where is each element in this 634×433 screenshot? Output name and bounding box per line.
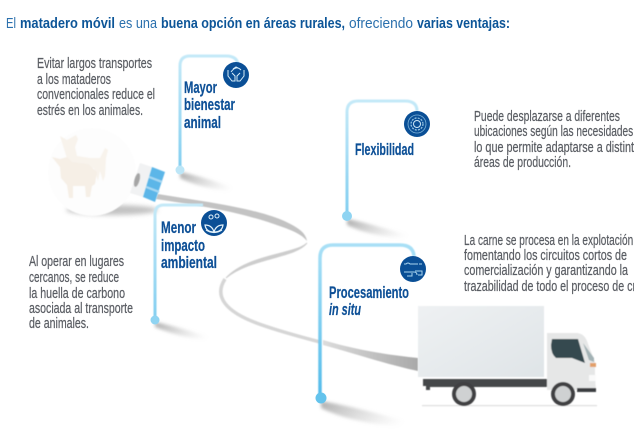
heading: ambiental <box>161 254 217 272</box>
icon: hands with animal <box>223 62 249 88</box>
text: stress: convencionales reduce el <box>37 86 155 103</box>
icon: rotating gear <box>404 111 430 137</box>
heading: Menor <box>161 219 196 237</box>
title: El <box>6 16 16 32</box>
cargo box <box>418 306 544 377</box>
heading <box>329 284 409 319</box>
icon: process flow <box>400 256 426 282</box>
panel: procesamiento in situ <box>316 245 426 404</box>
heading: in situ <box>329 301 361 319</box>
headlight and bumper <box>589 375 596 381</box>
text: flexibility <box>474 108 634 171</box>
connector 2 <box>347 101 417 215</box>
rear wheel <box>452 382 476 406</box>
heading <box>184 79 235 132</box>
text: stress <box>37 55 155 119</box>
illustration: sheep in glass vial <box>48 128 165 216</box>
illustration: truck <box>418 306 597 406</box>
panel: flexibilidad <box>342 101 430 221</box>
text: processing <box>464 232 634 295</box>
text: stress: Evitar largos transportes <box>37 55 152 72</box>
vial shadow <box>66 205 158 215</box>
rear sheep <box>60 135 108 181</box>
text: stress: estrés en los animales. <box>37 102 143 119</box>
title: matadero móvil <box>20 16 115 32</box>
chassis <box>423 379 550 390</box>
text: flexibility: áreas de producción. <box>474 154 571 171</box>
heading: impacto <box>161 237 205 255</box>
heading: Procesamiento <box>329 284 409 302</box>
text: carbon: cercanos, se reduce <box>29 269 119 286</box>
title: es una <box>119 16 158 32</box>
text: carbon <box>29 253 133 332</box>
text: carbon: de animales. <box>29 315 89 332</box>
panel: mayor bienestar animal <box>176 56 249 174</box>
text: carbon: la huella de carbono <box>29 285 125 302</box>
title <box>6 16 510 32</box>
heading: bienestar <box>184 96 235 114</box>
text: stress: a los mataderos <box>37 71 111 88</box>
title: ofreciendo <box>349 16 413 32</box>
title: varias ventajas: <box>417 16 510 32</box>
blue cap <box>143 167 165 202</box>
cab window <box>551 339 585 363</box>
connector 3 <box>155 205 203 320</box>
text: carbon: Al operar en lugares <box>29 253 124 270</box>
icon: leaves <box>201 210 227 236</box>
front wheel <box>551 382 575 406</box>
ground line <box>422 405 597 406</box>
heading: animal <box>184 114 221 132</box>
panel: menor impacto ambiental <box>150 205 227 324</box>
title: buena opción en áreas rurales, <box>161 16 345 32</box>
connector 1 <box>180 56 238 170</box>
winding grey road <box>156 194 418 371</box>
connector 4 <box>320 245 414 397</box>
cab <box>547 333 596 390</box>
heading <box>161 219 217 272</box>
text: carbon: asociada al transporte <box>29 300 133 317</box>
front sheep <box>52 157 97 198</box>
sheep group <box>48 128 136 216</box>
vial neck <box>130 163 152 197</box>
heading: Flexibilidad <box>355 141 414 159</box>
heading: Mayor <box>184 79 217 97</box>
drop shadows under connector dots <box>155 172 420 426</box>
